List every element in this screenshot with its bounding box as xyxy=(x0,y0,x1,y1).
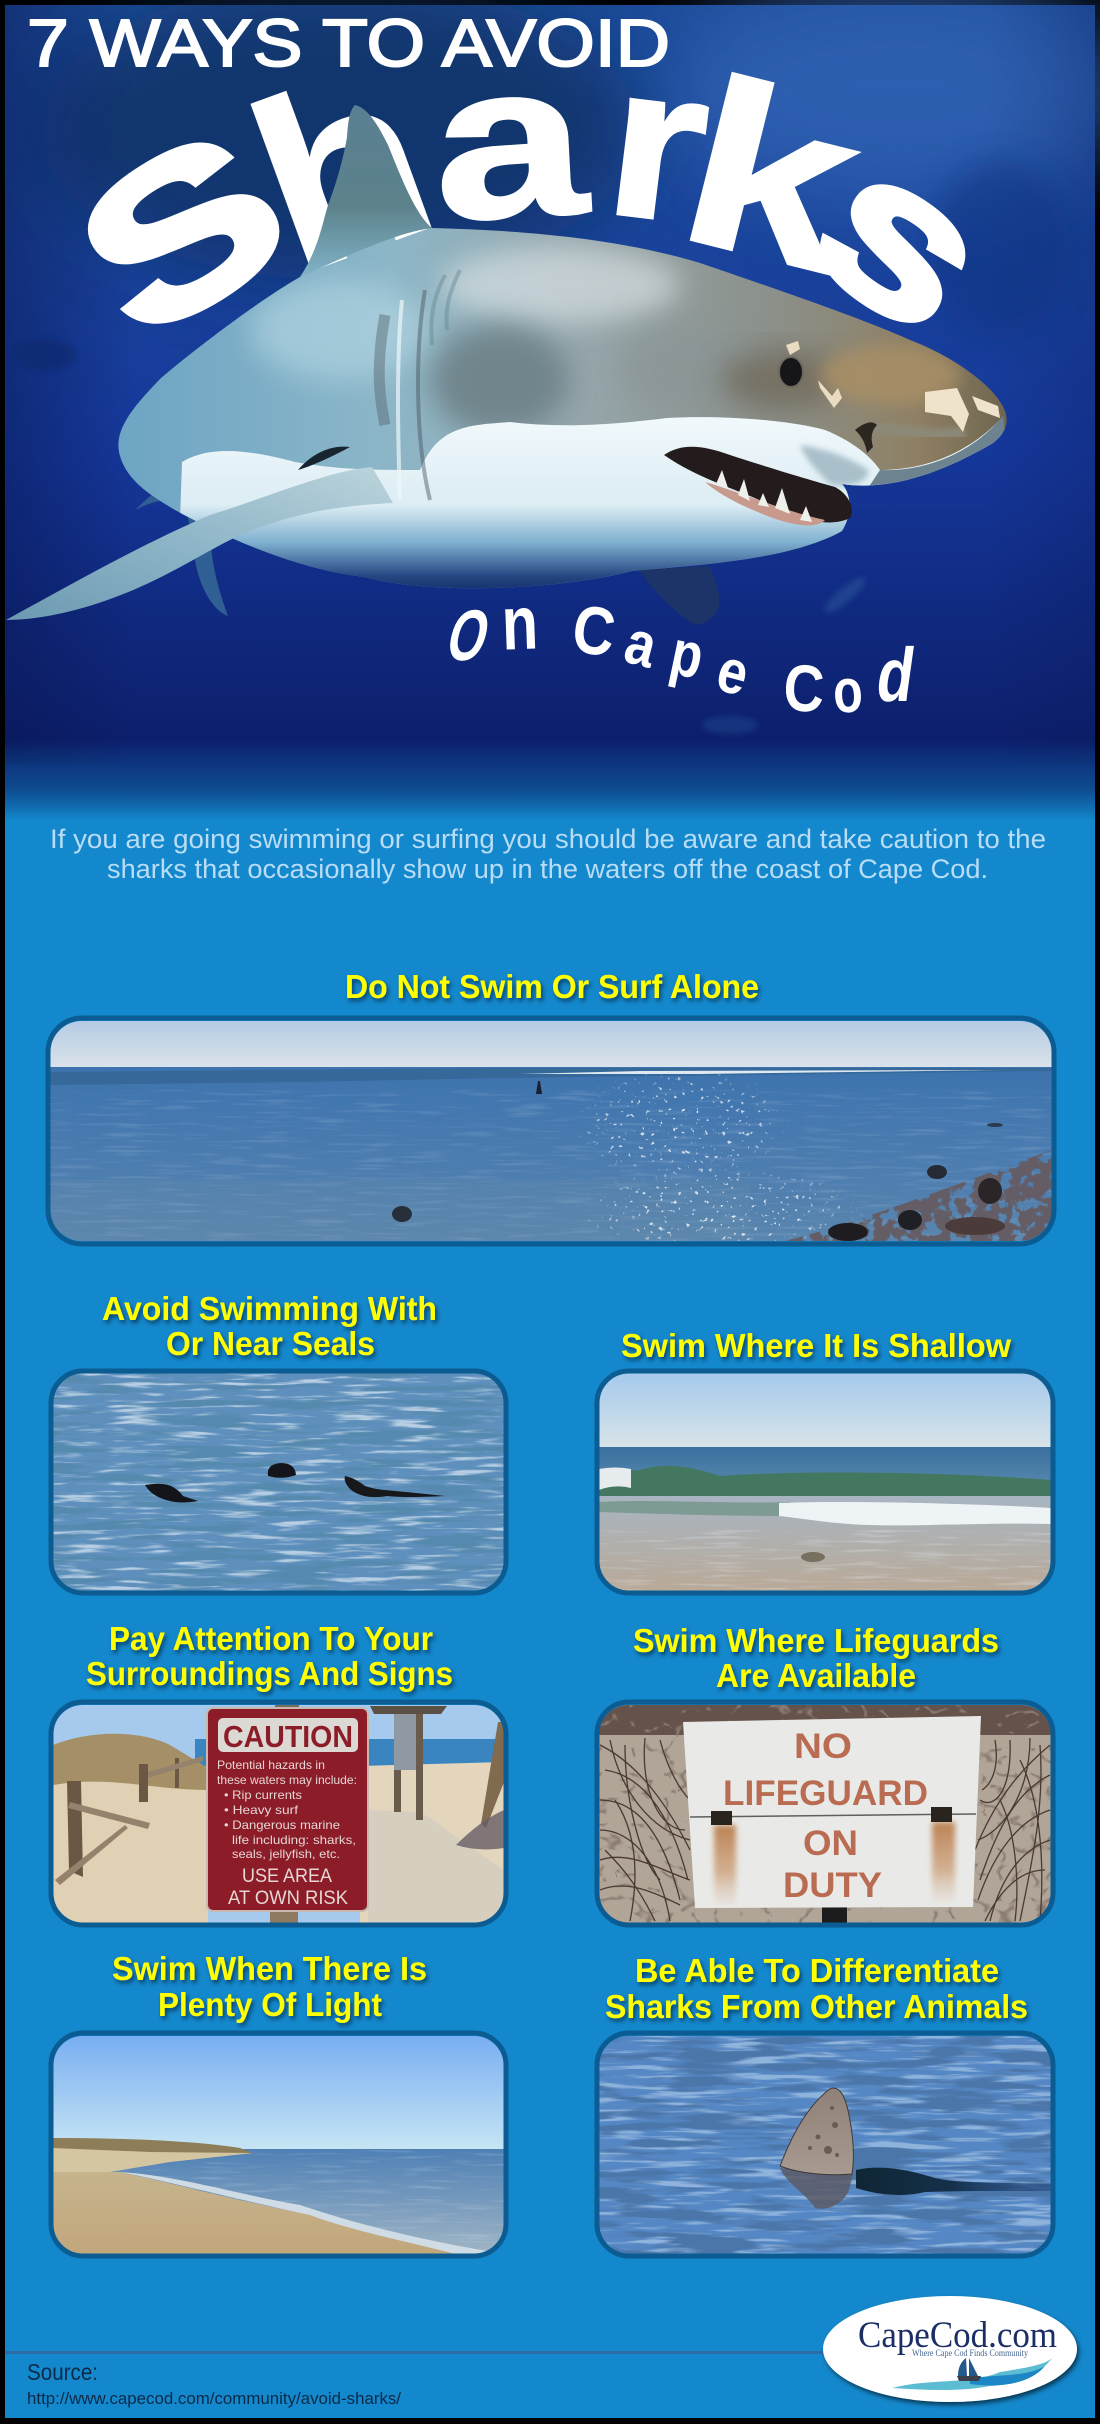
photo: no lifeguard on duty sign: LIFEGUARD xyxy=(723,1774,928,1813)
intro text: sharks that occasionally show up in the waters off the coast of Cape Cod. xyxy=(107,854,988,884)
photo: shark fin in water xyxy=(597,2033,1053,2256)
title: Sharks arched word: S xyxy=(38,82,325,384)
heading: light: Swim When There Is xyxy=(112,1950,427,1987)
hero photo: great white shark xyxy=(5,0,1100,820)
logo: CapeCod.com: CapeCod.com xyxy=(858,2315,1057,2356)
photo: seals in water xyxy=(51,1371,506,1593)
heading: signs xyxy=(86,1620,453,1692)
subtitle: On Cape Cod arched xyxy=(439,580,920,726)
heading: shallow: Swim Where It Is Shallow xyxy=(621,1327,1011,1364)
photo: no lifeguard on duty sign xyxy=(597,1702,1053,1925)
subtitle: On Cape Cod arched: O xyxy=(439,596,498,676)
heading: seals: Avoid Swimming With xyxy=(102,1290,437,1327)
heading: seals xyxy=(102,1290,437,1362)
eye xyxy=(779,341,1000,453)
photo: caution sign on beach path: • Heavy surf xyxy=(224,1803,299,1817)
photo: caution sign on beach path: • Dangerous marine xyxy=(224,1818,340,1832)
photo: beach in daylight xyxy=(51,2033,506,2256)
subtitle: On Cape Cod arched: C xyxy=(782,651,826,726)
logo: CapeCod.com: Where Cape Cod Finds Community xyxy=(912,2348,1028,2358)
intro text: If you are going swimming or surfing you should be aware and take caution to the xyxy=(50,824,1046,854)
photo: caution sign on beach path: Potential hazards in xyxy=(217,1758,325,1772)
heading: lifeguards xyxy=(633,1622,999,1694)
title: Sharks arched word: h xyxy=(220,15,463,325)
heading: signs: Surroundings And Signs xyxy=(86,1655,453,1692)
subtitle: On Cape Cod arched: o xyxy=(831,656,864,726)
photo: caution sign on beach path: USE AREA xyxy=(242,1866,332,1887)
heading: do not swim alone: Do Not Swim Or Surf Alone xyxy=(345,968,759,1005)
rear fins xyxy=(135,470,228,616)
photo: no lifeguard on duty sign: DUTY xyxy=(783,1866,882,1905)
title: 7 ways to avoid: 7 WAYS TO AVOID xyxy=(27,6,670,81)
subtitle: On Cape Cod arched: n xyxy=(500,580,539,666)
photo: lone surfer on flat sea xyxy=(48,1018,1060,1250)
heading: differentiate: Be Able To Differentiate xyxy=(635,1952,999,1989)
source credit: Source: xyxy=(27,2359,98,2385)
ventral fin xyxy=(639,566,719,625)
footer divider xyxy=(5,2351,827,2354)
photo: no lifeguard on duty sign: ON xyxy=(803,1824,858,1863)
title: Sharks arched word xyxy=(38,15,1031,384)
heading: seals: Or Near Seals xyxy=(166,1325,375,1362)
subtitle: On Cape Cod arched: d xyxy=(872,632,920,718)
photo: caution sign on beach path: CAUTION xyxy=(223,1719,353,1754)
photo: caution sign on beach path: AT OWN RISK xyxy=(228,1888,348,1909)
photo: shallow wave on beach xyxy=(597,1371,1053,1593)
photo: caution sign on beach path: these waters may include: xyxy=(217,1773,357,1787)
shark body xyxy=(100,220,1020,600)
mouth xyxy=(664,447,852,525)
source credit: http://www.capecod.com/community/avoid-sharks/ xyxy=(27,2389,401,2408)
title: Sharks arched word: r xyxy=(595,15,721,270)
heading: lifeguards: Swim Where Lifeguards xyxy=(633,1622,999,1659)
heading: signs: Pay Attention To Your xyxy=(109,1620,433,1657)
photo: caution sign on beach path: life including: sharks, xyxy=(232,1833,356,1847)
logo: CapeCod.com xyxy=(823,2296,1077,2402)
heading: differentiate: Sharks From Other Animals xyxy=(605,1988,1028,2025)
heading: light xyxy=(112,1950,427,2023)
subtitle: On Cape Cod arched: a xyxy=(618,608,665,682)
photo: caution sign on beach path xyxy=(51,1700,506,1925)
source credit xyxy=(27,2359,401,2408)
blend from photo into panel xyxy=(5,740,1095,820)
heading: differentiate xyxy=(605,1952,1028,2025)
intro text xyxy=(50,824,1046,884)
heading: light: Plenty Of Light xyxy=(158,1986,382,2023)
subtitle: On Cape Cod arched: C xyxy=(568,591,620,672)
title: Sharks arched word: k xyxy=(660,27,885,324)
dorsal fin xyxy=(300,105,432,277)
photo: no lifeguard on duty sign: NO xyxy=(794,1727,852,1766)
title: Sharks arched word: a xyxy=(427,16,593,267)
photo: caution sign on beach path: seals, jellyfish, etc. xyxy=(232,1847,340,1861)
logo icon: sailboat and waves xyxy=(892,2358,1052,2390)
pectoral fin xyxy=(6,467,393,620)
subtitle: On Cape Cod arched: p xyxy=(664,617,710,693)
subtitle: On Cape Cod arched: e xyxy=(710,636,756,710)
heading: lifeguards: Are Available xyxy=(716,1657,916,1694)
photo: caution sign on beach path: • Rip currents xyxy=(224,1788,302,1802)
title: Sharks arched word: s xyxy=(777,101,1031,377)
